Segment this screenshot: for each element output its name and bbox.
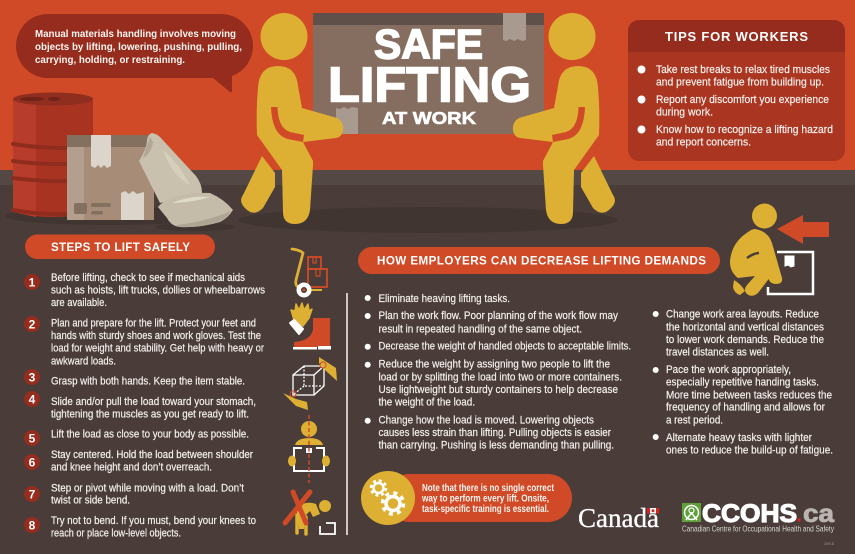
employer list, left column: Eliminate heaving lifting tasks. xyxy=(378,293,510,305)
employer list, right column xyxy=(653,309,833,457)
logo: CCOHS.ca xyxy=(682,500,835,534)
panel: tips for workers: and prevent fatigue from building up. xyxy=(656,76,824,88)
employer list, left column: load or by splitting the load into two or more containers. xyxy=(378,371,622,383)
step 2: load for weight and stability. Get help with heavy or xyxy=(51,343,264,355)
employer list, right column: ones to reduce the build-up of fatigue. xyxy=(666,445,833,457)
step 6: 6 xyxy=(29,456,36,470)
figure: right worker xyxy=(513,13,615,224)
step 1: 1 xyxy=(29,276,36,290)
employer list, right column: travel distances as well. xyxy=(666,347,769,359)
employer list, left column: the weight of the load. xyxy=(378,397,475,409)
step 3 xyxy=(24,369,245,387)
step 3: Grasp with both hands. Keep the item stable. xyxy=(51,375,245,387)
callout: note on training: task-specific training is essential. xyxy=(422,504,549,515)
icon: squatting worker with arrow xyxy=(730,204,829,296)
icon: centered load xyxy=(288,415,330,483)
step 3: 3 xyxy=(29,370,36,384)
heading: LIFTING: LIFTING xyxy=(328,58,531,112)
step 2: awkward loads. xyxy=(51,355,116,367)
steps list xyxy=(24,272,266,540)
step 4 xyxy=(24,391,256,421)
employer list, right column: More time between tasks reduces the xyxy=(666,389,832,401)
callout: manual materials handling xyxy=(16,14,253,92)
employer list, right column: Alternate heavy tasks with lighter xyxy=(666,432,812,444)
divider line xyxy=(346,293,348,535)
employer list, right column: especially repetitive handing tasks. xyxy=(666,377,819,389)
callout: manual materials handling: carrying, holding, or restraining. xyxy=(35,55,185,66)
step 7: twist or side bend. xyxy=(51,495,130,507)
employer list, right column: Pace the work appropriately, xyxy=(666,364,791,376)
step 8: 8 xyxy=(29,518,36,532)
step 1: Before lifting, check to see if mechanical aids xyxy=(51,272,246,284)
step 1: are available. xyxy=(51,297,107,309)
logo: CCOHS.ca: CCOHS xyxy=(702,500,797,528)
heading: AT WORK: AT WORK xyxy=(382,108,476,128)
employer list, left column: than carrying. Pushing is less demanding than pulling. xyxy=(378,440,614,452)
step 7: 7 xyxy=(29,488,36,502)
illustration: cardboard box xyxy=(67,135,154,220)
step 7: Step or pivot while moving with a load. Don’t xyxy=(51,482,244,494)
employer list, right column: a rest period. xyxy=(666,414,723,426)
callout: manual materials handling: objects by lifting, lowering, pushing, pulling, xyxy=(35,42,242,53)
step 6 xyxy=(24,449,253,474)
panel: tips for workers: and report concerns. xyxy=(656,136,751,148)
heading: SAFE: SAFE xyxy=(374,20,483,68)
panel: tips for workers: during work. xyxy=(656,106,713,118)
employer list, left column: Plan the work flow. Poor planning of the work flow may xyxy=(378,310,619,322)
step 1: such as hoists, lift trucks, dollies or wheelbarrows xyxy=(51,285,266,297)
step 7 xyxy=(24,482,244,507)
step 5 xyxy=(24,429,249,446)
logo: CCOHS.ca: ca xyxy=(803,500,835,528)
illustration: sandbags xyxy=(139,133,233,227)
heading: tips for workers: TIPS FOR WORKERS xyxy=(665,29,808,44)
step 5: 5 xyxy=(29,432,36,446)
icon: do not bend xyxy=(285,492,335,534)
employer list, right column: to lower work demands. Reduce the xyxy=(666,334,824,346)
background: orange wall xyxy=(0,0,855,170)
step 4: 4 xyxy=(29,392,36,406)
heading pill: how employers can decrease lifting demands: HOW EMPLOYERS CAN DECREASE LIFTING DEMANDS xyxy=(377,254,706,268)
employer list, right column: the horizontal and vertical distances xyxy=(666,321,825,333)
employer list, left column: Change how the load is moved. Lowering objects xyxy=(378,414,595,426)
step 2 xyxy=(24,316,264,367)
illustration: red barrel xyxy=(13,92,93,217)
icon: glove and boot xyxy=(290,303,331,350)
employer list, left column: Reduce the weight by assigning two people to lift the xyxy=(378,359,610,371)
callout: note on training: Note that there is no single correct xyxy=(422,483,555,494)
icon: gears xyxy=(371,480,404,514)
employer list, left column: Decrease the weight of handled objects to acceptable limits. xyxy=(378,340,631,352)
step 6: Stay centered. Hold the load between shoulder xyxy=(51,449,253,461)
step 2: Plan and prepare for the lift. Protect your feet and xyxy=(51,318,256,330)
employer list, left column: result in repeated handling of the same object. xyxy=(378,324,582,336)
icon: hand truck with boxes xyxy=(292,249,327,298)
step 4: tightening the muscles as you get ready to lift. xyxy=(51,409,249,421)
step 8: Try not to bend. If you must, bend your knees to xyxy=(51,515,256,527)
callout: note on training xyxy=(361,471,572,525)
step 4: Slide and/or pull the load toward your stomach, xyxy=(51,396,256,408)
title box xyxy=(313,13,544,134)
step 5: Lift the load as close to your body as possible. xyxy=(51,429,249,441)
panel: tips for workers: Report any discomfort you experience xyxy=(656,94,829,106)
step 8 xyxy=(24,515,256,540)
employer list, right column: frequency of handling and allows for xyxy=(666,402,825,414)
panel: tips for workers: Know how to recognize a lifting hazard xyxy=(656,124,833,136)
heading pill: steps to lift safely: STEPS TO LIFT SAFELY xyxy=(51,241,190,254)
figure: left worker xyxy=(241,13,343,224)
employer list, left column: causes less strain than lifting. Pulling objects is easier xyxy=(378,427,611,439)
document code: 2009-B xyxy=(824,542,835,546)
panel: tips for workers xyxy=(628,20,845,161)
heading pill: steps to lift safely xyxy=(25,234,215,259)
step 2: hands with sturdy shoes and work gloves. Test the xyxy=(51,330,261,342)
step 2: 2 xyxy=(29,318,36,332)
heading pill: how employers can decrease lifting demands xyxy=(358,247,720,274)
callout: manual materials handling: Manual materials handling involves moving xyxy=(35,29,236,40)
background: floor xyxy=(0,170,855,554)
step 8: reach or place low-level objects. xyxy=(51,528,181,540)
employer list, left column xyxy=(365,293,631,452)
employer list, right column: Change work area layouts. Reduce xyxy=(666,309,819,321)
icon: cube held by hands xyxy=(283,357,337,410)
panel: tips for workers: Take rest breaks to relax tired muscles xyxy=(656,64,831,76)
step 1 xyxy=(24,272,266,309)
employer list, left column: Use lightweight but sturdy containers to help decrease xyxy=(378,384,618,396)
step 6: and knee height and don’t overreach. xyxy=(51,462,212,474)
logo: Canada wordmark: Canada xyxy=(578,503,659,533)
callout: note on training: way to perform every lift. Onsite, xyxy=(421,494,549,505)
